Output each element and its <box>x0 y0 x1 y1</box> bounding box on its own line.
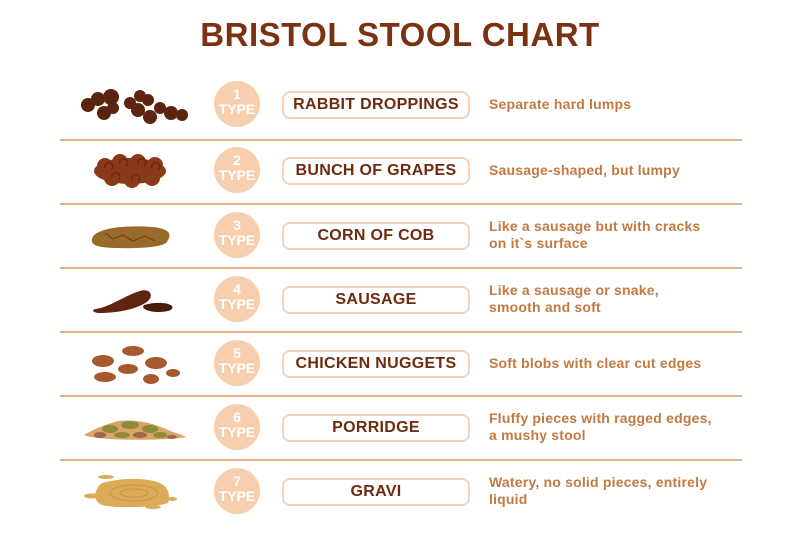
type badge 6 <box>214 404 260 450</box>
type badge 7: TYPE <box>219 488 255 504</box>
type badge 2 <box>214 147 260 193</box>
row 5 <box>92 340 701 386</box>
description: Sausage-shaped, but lumpy <box>489 162 680 178</box>
row 4 <box>93 276 659 322</box>
icon: gravi puddle <box>84 475 177 509</box>
description: Separate hard lumps <box>489 96 631 112</box>
type badge 7: 7 <box>233 473 241 489</box>
description: Like a sausage or snake, <box>489 282 659 298</box>
description: Watery, no solid pieces, entirely <box>489 474 707 490</box>
label pill <box>282 222 470 250</box>
type badge 3: TYPE <box>219 232 255 248</box>
label pill: GRAVI <box>350 483 401 500</box>
label pill <box>282 350 470 378</box>
type badge 1 <box>214 81 260 127</box>
type badge 7 <box>214 468 260 514</box>
label pill: CORN OF COB <box>317 227 435 244</box>
type badge 3: 3 <box>233 217 241 233</box>
description <box>489 474 707 507</box>
icon: rabbit droppings <box>81 89 188 124</box>
row 6 <box>84 404 712 450</box>
type badge 5: TYPE <box>219 360 255 376</box>
row 3 <box>92 212 700 258</box>
type badge 5 <box>214 340 260 386</box>
type badge 3 <box>214 212 260 258</box>
label pill <box>282 286 470 314</box>
description: on it`s surface <box>489 235 588 251</box>
description: liquid <box>489 491 528 507</box>
row 7 <box>84 468 707 514</box>
label pill: PORRIDGE <box>332 419 420 436</box>
label pill <box>282 157 470 185</box>
icon: grapes <box>94 154 166 188</box>
type badge 5: 5 <box>233 345 241 361</box>
description: Soft blobs with clear cut edges <box>489 355 701 371</box>
type badge 4: 4 <box>233 281 241 297</box>
description: Like a sausage but with cracks <box>489 218 700 234</box>
icon: porridge <box>84 420 186 440</box>
label pill: RABBIT DROPPINGS <box>293 96 459 113</box>
row 2 <box>94 147 680 193</box>
description: a mushy stool <box>489 427 586 443</box>
label pill <box>282 478 470 506</box>
description: smooth and soft <box>489 299 601 315</box>
icon: sausage <box>93 290 172 313</box>
row 1 <box>81 81 631 127</box>
icon: corn of cob <box>92 226 170 248</box>
label pill <box>282 91 470 119</box>
type badge 2: 2 <box>233 152 241 168</box>
label pill <box>282 414 470 442</box>
type badge 1: 1 <box>233 86 241 102</box>
icon: chicken nuggets <box>92 346 180 384</box>
type badge 6: TYPE <box>219 424 255 440</box>
description: Fluffy pieces with ragged edges, <box>489 410 712 426</box>
type badge 6: 6 <box>233 409 241 425</box>
label pill: CHICKEN NUGGETS <box>296 355 456 372</box>
label pill: SAUSAGE <box>335 291 417 308</box>
description <box>489 218 700 251</box>
type badge 4: TYPE <box>219 296 255 312</box>
label pill: BUNCH OF GRAPES <box>296 162 456 179</box>
type badge 1: TYPE <box>219 101 255 117</box>
description <box>489 282 659 315</box>
type badge 2: TYPE <box>219 167 255 183</box>
description <box>489 410 712 443</box>
title: BRISTOL STOOL CHART <box>200 16 600 53</box>
type badge 4 <box>214 276 260 322</box>
